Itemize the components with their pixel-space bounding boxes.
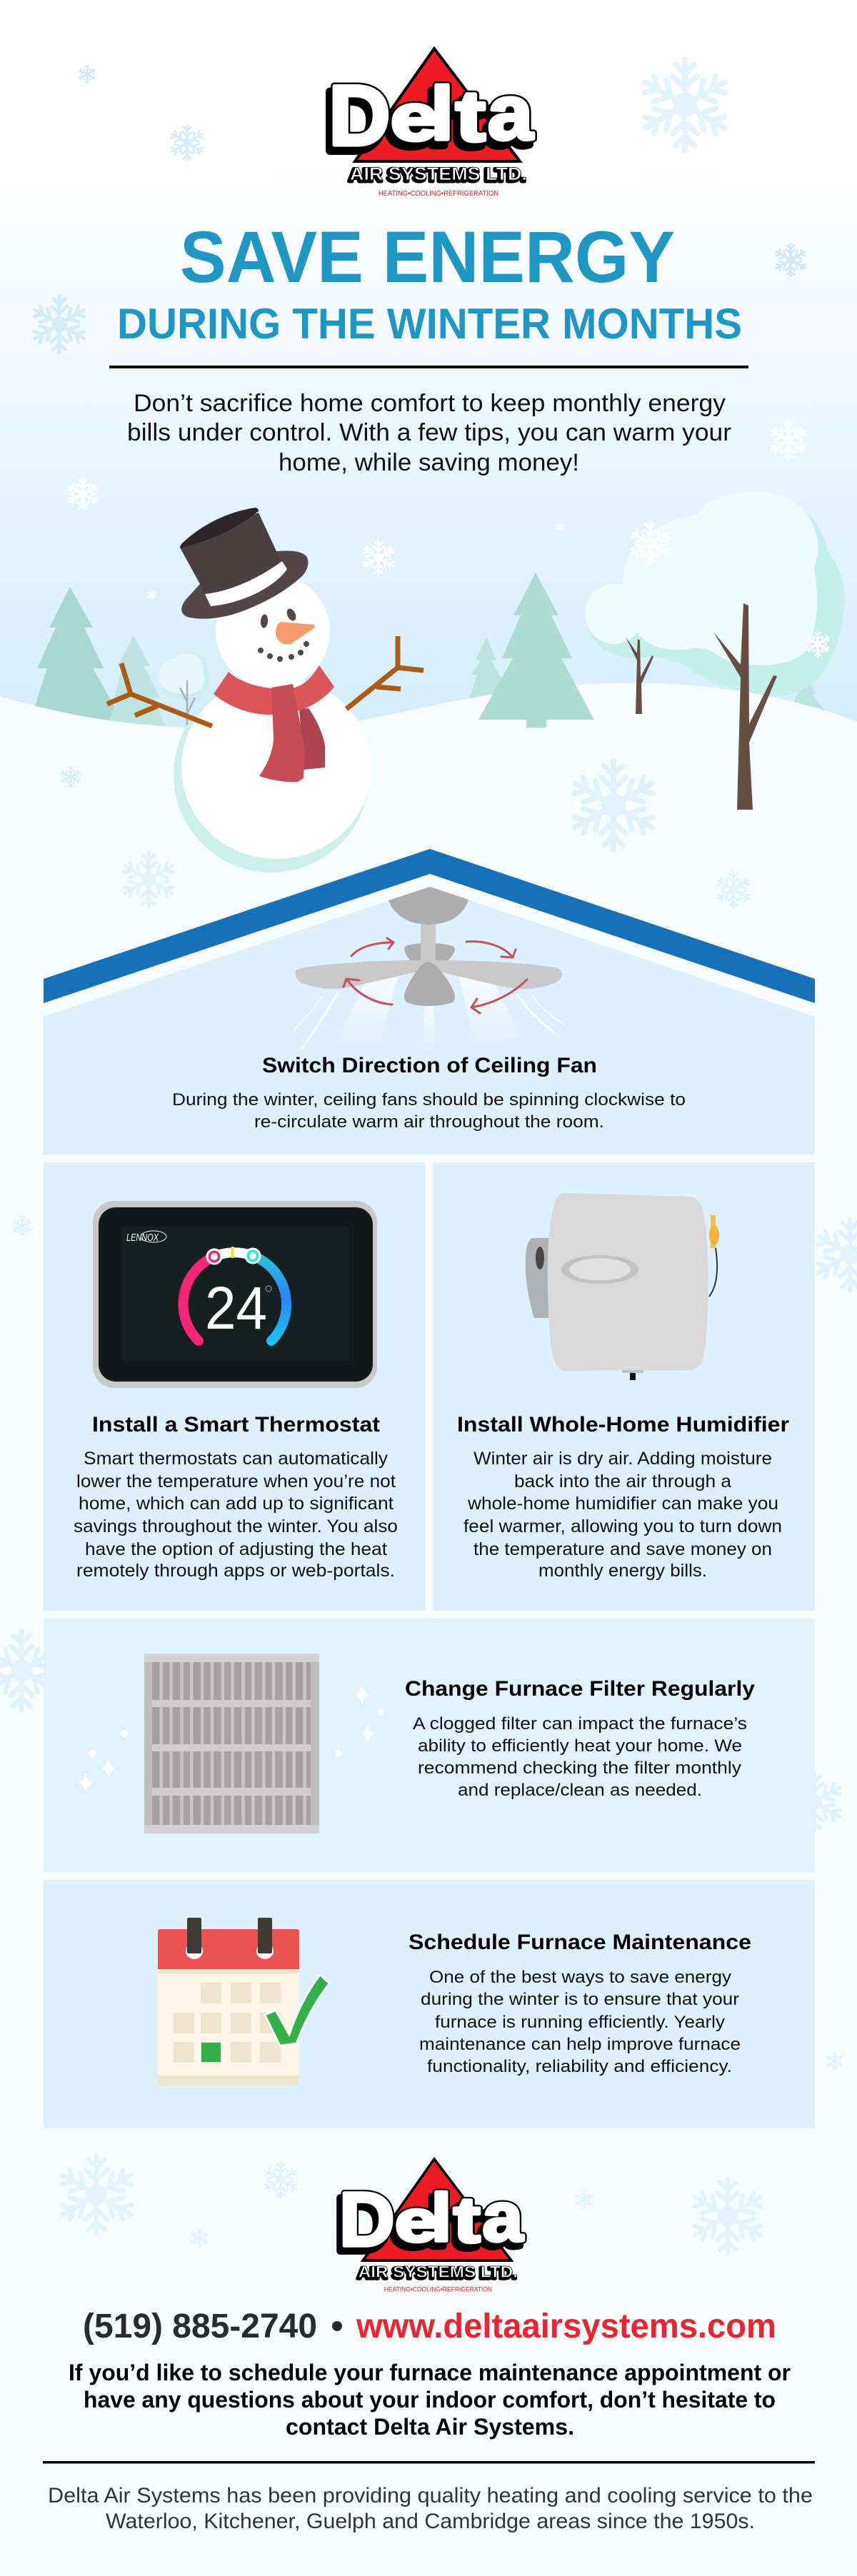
degree symbol — [266, 1286, 271, 1292]
humidifier heading: Install Whole-Home Humidifier — [457, 1413, 789, 1437]
furnace filter illustration — [144, 1654, 319, 1833]
snowman body — [181, 676, 371, 859]
bare tree trunks — [626, 603, 777, 810]
footer logo: D — [339, 2176, 395, 2263]
thermostat description: lower the temperature when you’re not — [76, 1471, 396, 1491]
footer logo: D — [339, 2176, 395, 2263]
temperature reading: 24 — [205, 1274, 267, 1342]
panel: furnace maintenance — [44, 1880, 815, 2128]
fan heading: Switch Direction of Ceiling Fan — [262, 1054, 597, 1077]
lower and scattered snowflakes — [0, 522, 857, 2254]
footer logo: a — [483, 2178, 524, 2256]
large round tree crown — [585, 492, 845, 696]
logo: a — [483, 76, 530, 161]
logo: D — [329, 68, 391, 163]
divider — [109, 366, 748, 368]
footer logo: HEATING•COOLING•REFRIGERATION — [384, 2285, 492, 2293]
mouth — [258, 641, 309, 662]
call to action — [69, 2360, 791, 2440]
contact line: www.deltaairsystems.com — [356, 2308, 776, 2345]
contact line — [83, 2308, 776, 2345]
check mark — [265, 1975, 329, 2046]
footer logo: a — [483, 2178, 524, 2256]
panel: humidifier — [433, 1162, 815, 1611]
contact line: (519) 885-2740 — [83, 2308, 317, 2345]
logo: t — [451, 82, 481, 161]
fan description — [172, 1090, 686, 1132]
logo: e — [386, 86, 434, 160]
logo — [324, 49, 534, 198]
footer logo: e — [395, 2188, 438, 2254]
snowy hills — [0, 683, 857, 2576]
footer logo: AIR SYSTEMS LTD. — [357, 2264, 516, 2282]
thermostat description: remotely through apps or web-portals. — [76, 1561, 395, 1581]
top hat — [180, 508, 308, 619]
stick arms — [107, 636, 424, 726]
logo: a — [488, 70, 534, 156]
call to action: If you’d like to schedule your furnace maintenance appointment or — [69, 2360, 791, 2385]
air rays — [294, 977, 564, 1050]
ceiling fan — [296, 887, 562, 1006]
company note: Waterloo, Kitchener, Guelph and Cambridge areas since the 1950s. — [106, 2510, 755, 2533]
intro text: home, while saving money! — [279, 449, 579, 476]
maintenance description — [419, 1968, 741, 2076]
filter description: ability to efficiently heat your home. We — [418, 1736, 742, 1756]
humidifier description: feel warmer, allowing you to turn down — [463, 1516, 782, 1536]
humidifier description: whole-home humidifier can make you — [467, 1494, 778, 1514]
humidifier description: Winter air is dry air. Adding moisture — [473, 1449, 772, 1469]
footer logo: t — [453, 2184, 480, 2256]
subtitle: during the winter months: DURING THE WINTER MONTHS — [117, 300, 742, 348]
thermostat description: have the option of adjusting the heat — [85, 1539, 387, 1559]
call to action: contact Delta Air Systems. — [286, 2414, 574, 2440]
panel: smart thermostat — [44, 1162, 425, 1611]
maintenance description: One of the best ways to save energy — [429, 1968, 732, 1987]
roof — [44, 849, 815, 1003]
filter description: recommend checking the filter monthly — [418, 1759, 742, 1778]
snowman shadow — [174, 677, 369, 872]
humidifier description: monthly energy bills. — [538, 1561, 707, 1581]
footer logo — [335, 2159, 524, 2293]
lennox label: LENNOX — [126, 1232, 159, 1244]
panel: ceiling fan — [44, 887, 815, 1154]
humidifier description: back into the air through a — [514, 1471, 731, 1491]
thermostat description — [74, 1449, 398, 1581]
intro text: Don’t sacrifice home comfort to keep monthly energy — [134, 390, 726, 417]
carrot nose — [276, 622, 315, 644]
thermostat description: home, which can add up to significant — [79, 1494, 394, 1514]
intro text: bills under control. With a few tips, you can warm your — [127, 419, 731, 446]
snowman — [107, 508, 424, 872]
footer logo: e — [391, 2193, 434, 2260]
footer logo: D — [335, 2181, 391, 2268]
logo: HEATING•COOLING•REFRIGERATION — [379, 190, 498, 198]
filter description — [413, 1714, 747, 1800]
logo: D — [329, 68, 391, 163]
fan description: During the winter, ceiling fans should be spinning clockwise to — [172, 1090, 686, 1110]
footer logo: t — [450, 2189, 476, 2261]
logo: e — [391, 80, 438, 154]
filter heading: Change Furnace Filter Regularly — [405, 1677, 755, 1701]
logo: D — [324, 74, 386, 169]
calendar — [158, 1918, 329, 2086]
maintenance description: furnace is running efficiently. Yearly — [435, 2013, 726, 2032]
footer logo: AIR SYSTEMS LTD. — [359, 2263, 518, 2281]
logo: AIR SYSTEMS LTD. — [349, 166, 526, 186]
logo: t — [456, 76, 486, 156]
scarf — [214, 665, 334, 715]
maintenance description: maintenance can help improve furnace — [419, 2035, 741, 2054]
intro text — [127, 390, 731, 476]
thermostat description: Smart thermostats can automatically — [84, 1449, 389, 1469]
eyes — [260, 614, 269, 628]
logo: t — [456, 76, 486, 156]
logo: a — [488, 70, 534, 156]
footer divider — [43, 2461, 815, 2463]
logo: AIR SYSTEMS LTD. — [350, 164, 527, 184]
humidifier description: the temperature and save money on — [473, 1539, 772, 1559]
panel: furnace filter — [44, 1619, 815, 1872]
company note — [48, 2484, 813, 2533]
humidifier description — [463, 1449, 782, 1581]
fan description: re-circulate warm air throughout the room. — [254, 1112, 604, 1132]
scarf front tail — [259, 684, 305, 782]
footer logo: l — [431, 2180, 451, 2255]
thermostat description: savings throughout the winter. You also — [74, 1516, 398, 1536]
logo: e — [391, 80, 438, 154]
footer logo: e — [395, 2188, 438, 2254]
center pine tree — [478, 573, 594, 728]
call to action: have any questions about your indoor comfort, don’t hesitate to — [84, 2387, 776, 2413]
company note: Delta Air Systems has been providing quality heating and cooling service to the — [48, 2484, 813, 2507]
logo: l — [426, 78, 449, 161]
maintenance description: functionality, reliability and efficiency. — [427, 2057, 732, 2076]
rotation arrows — [344, 938, 527, 1013]
thermostat heading: Install a Smart Thermostat — [92, 1413, 380, 1437]
background trees — [30, 587, 830, 728]
footer logo: a — [478, 2184, 520, 2261]
temperature gauge — [183, 1247, 286, 1341]
snowflakes in the sky — [31, 59, 808, 600]
footer logo: l — [431, 2180, 451, 2255]
filter description: A clogged filter can impact the furnace’s — [413, 1714, 747, 1734]
maintenance heading: Schedule Furnace Maintenance — [409, 1931, 751, 1954]
scarf back tail — [299, 708, 325, 770]
sparkles — [79, 1684, 384, 1793]
maintenance description: during the winter is to ensure that your — [421, 1990, 739, 2009]
filter description: and replace/clean as needed. — [458, 1781, 702, 1800]
page background — [0, 0, 857, 750]
snowman head — [216, 574, 330, 688]
title: save energy: SAVE ENERGY — [180, 216, 675, 298]
humidifier unit — [526, 1193, 719, 1380]
footer logo: l — [427, 2185, 448, 2260]
logo: l — [431, 72, 453, 156]
footer logo: t — [453, 2184, 480, 2256]
logo: l — [431, 72, 453, 156]
thermostat device — [93, 1201, 377, 1388]
